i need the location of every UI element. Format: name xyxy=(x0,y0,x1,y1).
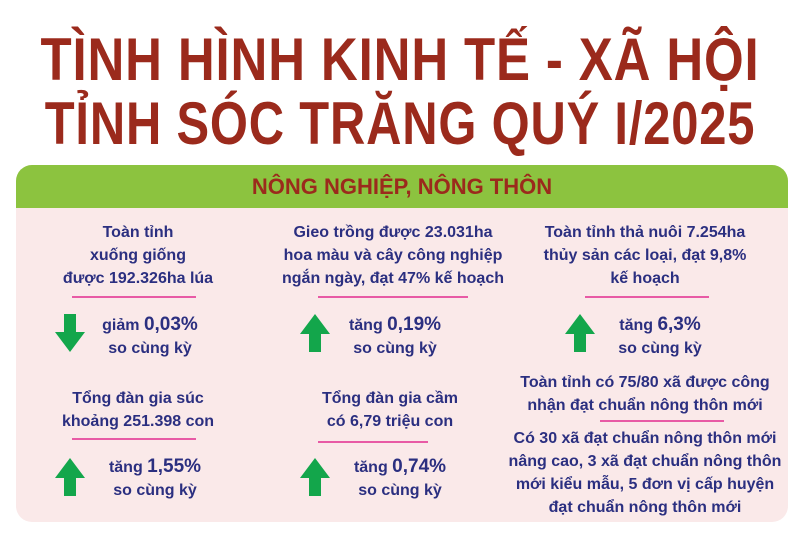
text: new rural communes xyxy=(520,374,770,414)
stat: crops change xyxy=(349,314,441,357)
text: advanced standards: mới kiểu mẫu, 5 đơn vị cấp huyện xyxy=(516,476,774,493)
text: poultry: có 6,79 triệu con xyxy=(327,413,453,430)
text: livestock xyxy=(62,390,214,430)
text: crops: hoa màu và cây công nghiệp xyxy=(284,247,502,264)
panel header: NÔNG NGHIỆP, NÔNG THÔN xyxy=(252,174,552,199)
text: rice: được 192.326ha lúa xyxy=(63,270,213,287)
text: rice: Toàn tỉnh xyxy=(103,224,173,241)
text: advanced standards: Có 30 xã đạt chuẩn nông thôn mới xyxy=(514,430,776,447)
stat: livestock change: so cùng kỳ xyxy=(113,482,197,499)
stat: aquaculture change: tăng 6,3% xyxy=(619,314,701,335)
text: poultry: Tổng đàn gia cầm xyxy=(322,390,458,407)
icon: up arrow xyxy=(300,314,330,352)
panel header xyxy=(16,165,788,208)
stat: crops change: so cùng kỳ xyxy=(353,340,437,357)
stat: poultry change: tăng 0,74% xyxy=(354,456,446,477)
icon: up arrow xyxy=(300,458,330,496)
text: crops: ngắn ngày, đạt 47% kế hoạch xyxy=(282,270,504,287)
stat: livestock change: tăng 1,55% xyxy=(109,456,201,477)
text: rice: xuống giống xyxy=(90,247,186,264)
text: aquaculture: Toàn tỉnh thả nuôi 7.254ha xyxy=(545,224,745,241)
text: livestock: Tổng đàn gia súc xyxy=(72,390,204,407)
text: poultry xyxy=(322,390,458,430)
stat: poultry change xyxy=(354,456,446,499)
stat: rice change xyxy=(102,314,198,357)
text: aquaculture: thủy sản các loại, đạt 9,8% xyxy=(544,247,746,264)
icon: up arrow xyxy=(565,314,595,352)
text: advanced standards: đạt chuẩn nông thôn mới xyxy=(549,499,741,516)
text: advanced standards: nâng cao, 3 xã đạt chuẩn nông thôn xyxy=(509,453,781,470)
stat: crops change: tăng 0,19% xyxy=(349,314,441,335)
stat: aquaculture change: so cùng kỳ xyxy=(618,340,702,357)
text: rice xyxy=(63,224,214,287)
text: crops xyxy=(282,224,504,287)
text: advanced standards xyxy=(509,430,781,516)
stat: rice change: so cùng kỳ xyxy=(108,340,192,357)
stat: poultry change: so cùng kỳ xyxy=(358,482,442,499)
text: aquaculture xyxy=(544,224,746,287)
stat: livestock change xyxy=(109,456,201,499)
stat: aquaculture change xyxy=(618,314,702,357)
stat: rice change: giảm 0,03% xyxy=(102,314,198,335)
text: new rural communes: nhận đạt chuẩn nông thôn mới xyxy=(527,397,763,414)
icon: up arrow xyxy=(55,458,85,496)
text: crops: Gieo trồng được 23.031ha xyxy=(293,224,492,241)
title line 2: TỈNH SÓC TRĂNG QUÝ I/2025 xyxy=(45,90,755,157)
panel: background xyxy=(16,165,788,522)
text: livestock: khoảng 251.398 con xyxy=(62,413,214,430)
icon: down arrow xyxy=(55,314,85,352)
text: aquaculture: kế hoạch xyxy=(610,270,680,287)
text: new rural communes: Toàn tỉnh có 75/80 xã được công xyxy=(520,374,770,391)
title line 1: TÌNH HÌNH KINH TẾ - XÃ HỘI xyxy=(40,26,760,93)
